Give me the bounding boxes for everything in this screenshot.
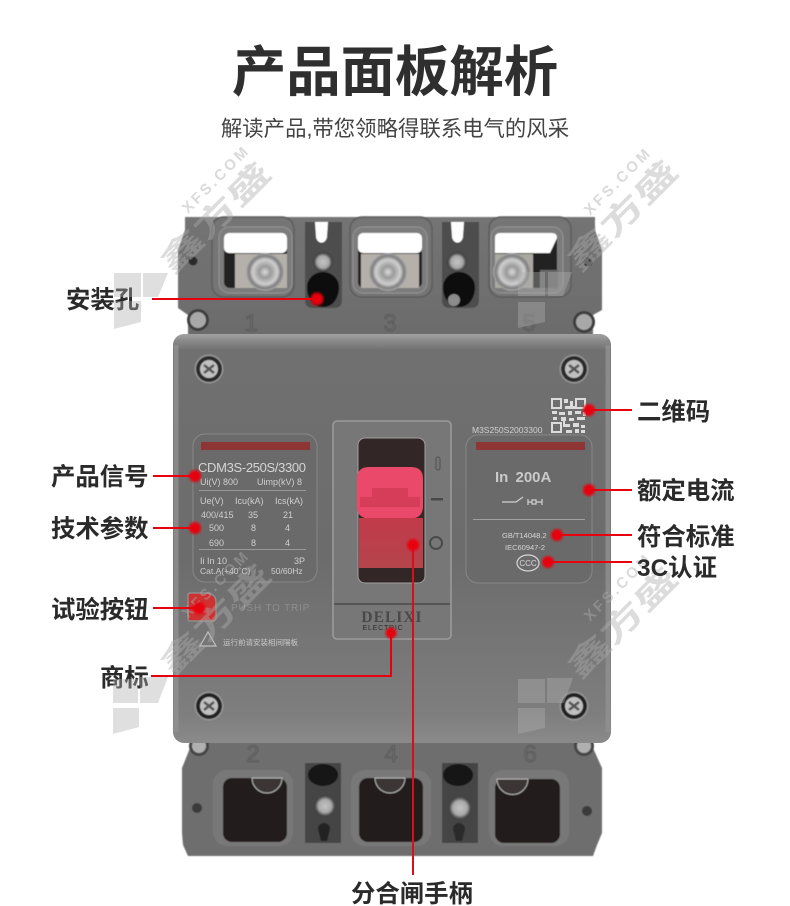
panel: rating plate left: 35 <box>248 510 258 520</box>
phase numbers: 3 <box>383 310 397 337</box>
watermarks <box>154 144 685 685</box>
subtitle: 解读产品,带您领略得联系电气的风采 <box>221 117 569 141</box>
panel: rating plate left: Cat.A(+40˚C) <box>200 566 250 576</box>
panel: rating plate left: 50/60Hz <box>271 566 303 576</box>
watermark logo tiles <box>113 272 573 734</box>
outlet 2 <box>351 770 431 846</box>
panel: rating plate left: 500 <box>209 523 224 533</box>
panel: rating plate left: Icu(kA) <box>235 496 264 506</box>
terminal window 2 <box>350 217 432 297</box>
watermarks: 鑫方盛 <box>154 558 278 682</box>
panel: rating plate left: 3P <box>294 556 305 566</box>
warning notice <box>200 632 298 647</box>
handle housing: ELECTRIC <box>362 625 404 632</box>
callout: 额定电流: 额定电流 <box>637 478 735 505</box>
terminal window 1 <box>212 217 294 297</box>
phase numbers: 5 <box>522 310 536 337</box>
cover screws <box>194 354 588 720</box>
callout: 额定电流 <box>583 478 735 505</box>
panel: rating plate left: 4 <box>285 523 290 533</box>
panel: rating plate right: IEC60947-2 <box>505 543 545 552</box>
brand logo: DELIXI <box>361 609 423 626</box>
watermarks: XFS.COM <box>179 549 252 622</box>
phase numbers <box>244 310 536 337</box>
panel: rating plate left: 690 <box>209 538 224 548</box>
slots <box>315 222 328 243</box>
panel: rating plate left: 8 <box>251 523 256 533</box>
outlet 1 <box>213 770 293 846</box>
watermarks: 鑫方盛 <box>154 156 278 280</box>
callout: 安装孔 <box>66 287 324 314</box>
callout: 3C认证: 3C认证 <box>637 555 717 582</box>
watermarks: 鑫方盛 <box>561 154 685 278</box>
main cover <box>173 334 611 743</box>
callout: 符合标准 <box>551 524 735 551</box>
push to trip text: PUSH TO TRIP <box>231 603 310 614</box>
watermarks: XFS.COM <box>179 144 252 217</box>
callout: 商标 <box>100 628 396 692</box>
callout: 二维码 <box>583 399 710 426</box>
watermarks: 鑫方盛 <box>561 561 685 685</box>
terminal window 3 <box>489 217 571 297</box>
callout: 试验按钮: 试验按钮 <box>51 596 149 624</box>
watermarks: XFS.COM <box>581 146 654 219</box>
top terminal block <box>178 217 602 337</box>
panel: rating plate left: Ii In 10 <box>200 556 227 566</box>
callout: 商标: 商标 <box>100 665 149 692</box>
callout: 3C认证 <box>542 555 717 582</box>
callout: 安装孔: 安装孔 <box>66 287 139 314</box>
panel: rating plate left: 21 <box>283 510 293 520</box>
panel: rating plate right <box>466 435 592 583</box>
callout: 试验按钮 <box>51 596 205 624</box>
phase numbers <box>246 741 537 768</box>
QR code <box>551 398 586 433</box>
callout: 分合闸手柄 <box>351 539 473 906</box>
handle housing <box>333 421 451 639</box>
panel: rating plate right: GB/T14048.2 <box>502 531 547 540</box>
panel: rating plate left: Ics(kA) <box>275 496 303 506</box>
title: 产品面板解析 <box>232 42 558 103</box>
panel: rating plate left: Ui(V) 800 <box>200 477 238 487</box>
callout: 二维码: 二维码 <box>637 399 710 426</box>
callout: 产品信号 <box>51 464 201 491</box>
panel: rating plate left <box>193 434 317 582</box>
panel: rating plate left: 4 <box>285 538 290 548</box>
panel: rating plate right: CCC <box>519 559 537 568</box>
callout: 符合标准: 符合标准 <box>637 524 735 551</box>
callout: 技术参数 <box>51 515 201 543</box>
phase numbers: 1 <box>244 310 258 337</box>
panel: rating plate right: In 200A <box>495 469 552 486</box>
bottom terminal block <box>182 736 602 856</box>
test button <box>188 593 216 621</box>
warning notice: 运行前请安装相间隔板 <box>223 637 298 647</box>
phase numbers: 6 <box>523 741 537 768</box>
phase numbers: 2 <box>246 741 260 768</box>
serial number: M3S250S2003300 <box>472 425 543 435</box>
panel: rating plate left: 8 <box>251 538 256 548</box>
callout: 技术参数: 技术参数 <box>51 515 149 543</box>
callout: 产品信号: 产品信号 <box>51 464 149 491</box>
mounting holes <box>307 272 339 307</box>
panel: rating plate left: CDM3S-250S/3300 <box>198 460 306 475</box>
watermarks: XFS.COM <box>581 552 654 625</box>
outlet 3 <box>489 770 569 846</box>
panel: rating plate left: Uimp(kV) 8 <box>257 477 302 487</box>
panel: rating plate left: 400/415 <box>201 510 234 520</box>
phase numbers: 4 <box>384 741 398 768</box>
panel: rating plate left: Ue(V) <box>200 496 224 506</box>
